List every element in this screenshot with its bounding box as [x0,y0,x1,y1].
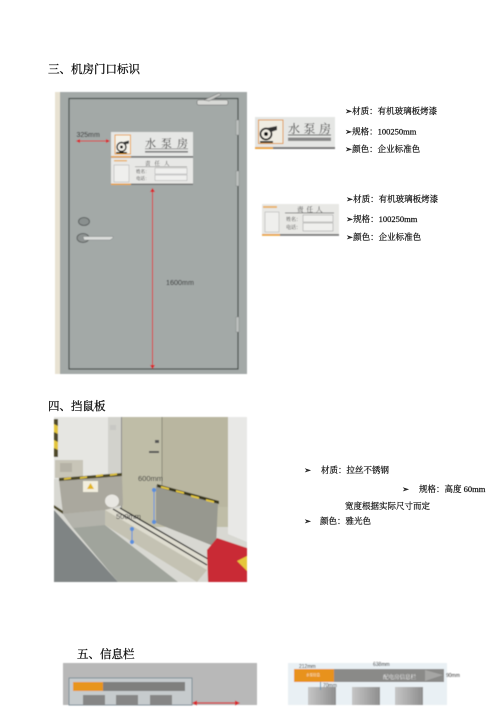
dimension label: 1600mm: 1600mm [166,278,194,287]
dimension label: 638mm: 638mm [373,662,390,668]
white object [105,494,119,508]
door closer [197,93,228,105]
blue measure lines [130,488,156,544]
panel: responsible person sign detail [262,204,339,236]
text block: rodent barrier specifications: ➢ [402,484,410,494]
heading: section 3: 三、机房门口标识 [48,62,140,76]
text block: rodent barrier specifications: 宽度根据实际尺寸而定 [345,501,431,511]
panel: info board design drawing [288,662,460,705]
door background [55,92,247,374]
panel: info board design drawing: 配电房信息栏 [383,673,417,681]
text block: pump room sign specifications: ➢材质：有机玻璃板烤漆 [345,106,438,116]
sign: responsible person on door: 电话： [136,175,150,182]
text block: responsible person sign specifications: ➢颜色：企业标准色 [346,232,422,242]
arrow: horizontal dimension [192,700,240,706]
text block: pump room sign specifications: ➢颜色：企业标准色 [345,144,421,154]
text block: rodent barrier specifications: 材质：拉丝不锈钢 [321,465,390,475]
text block: rodent barrier specifications: ➢ [304,465,312,475]
heading: section 4: 四、挡鼠板 [48,399,106,413]
text block: pump room sign specifications: ➢规格：100250mm [345,126,417,136]
text block: responsible person sign specifications: ➢材质：有机玻璃板烤漆 [346,194,439,204]
door lock [78,218,90,226]
dimension label: 500mm: 500mm [116,512,141,521]
text block: rodent barrier specifications: ➢ [304,516,312,526]
heading: section 5: 五、信息栏 [77,647,135,661]
concrete step with stripes [105,508,208,582]
panel: responsible person sign detail: 电话： [286,224,301,231]
door hinges [236,120,239,332]
panel: pump room sign detail [255,117,335,149]
dimension label: 70mm: 70mm [323,683,337,689]
text block: rodent barrier specifications: 规格：高度 60mm [419,484,486,494]
panel: pump room sign detail: 水泵房 [288,121,335,136]
dimension label: 90mm: 90mm [446,673,460,679]
door metal flood panel [156,484,219,547]
door handle [77,234,113,242]
left metal barrier [54,473,123,514]
floor [54,510,178,582]
sign: water pump room on door: 水泵房 [145,136,193,150]
dimension label: 212mm: 212mm [299,664,316,670]
sign: responsible person on door: 姓名： [136,168,150,175]
text block: responsible person sign specifications [346,194,439,242]
sign: water pump room on door [111,132,193,158]
panel: rodent barrier photo [54,417,247,582]
panel: door photo with signage [55,92,247,374]
dimension label: 600mm: 600mm [138,474,163,483]
panel: responsible person sign detail: 姓名： [286,216,301,223]
text block: pump room sign specifications [345,106,438,154]
arrow: 1600mm vertical [150,188,155,369]
sign: responsible person on door [111,158,193,185]
red fire box [207,538,247,582]
panel: responsible person sign detail: 责任人 [297,204,326,214]
photo background [54,417,247,582]
dimension label: 325mm: 325mm [76,132,100,139]
panel: info board photo [63,663,257,706]
sign: responsible person on door: 责任人 [145,160,174,168]
arrow: 325mm horizontal [76,139,110,143]
text block: rodent barrier specifications: 颜色：雅光色 [320,516,372,526]
text block: responsible person sign specifications: ➢规格：100250mm [346,214,418,224]
panel: info board design drawing: 水泵信息 [306,672,320,677]
text block: rodent barrier specifications [304,465,486,526]
